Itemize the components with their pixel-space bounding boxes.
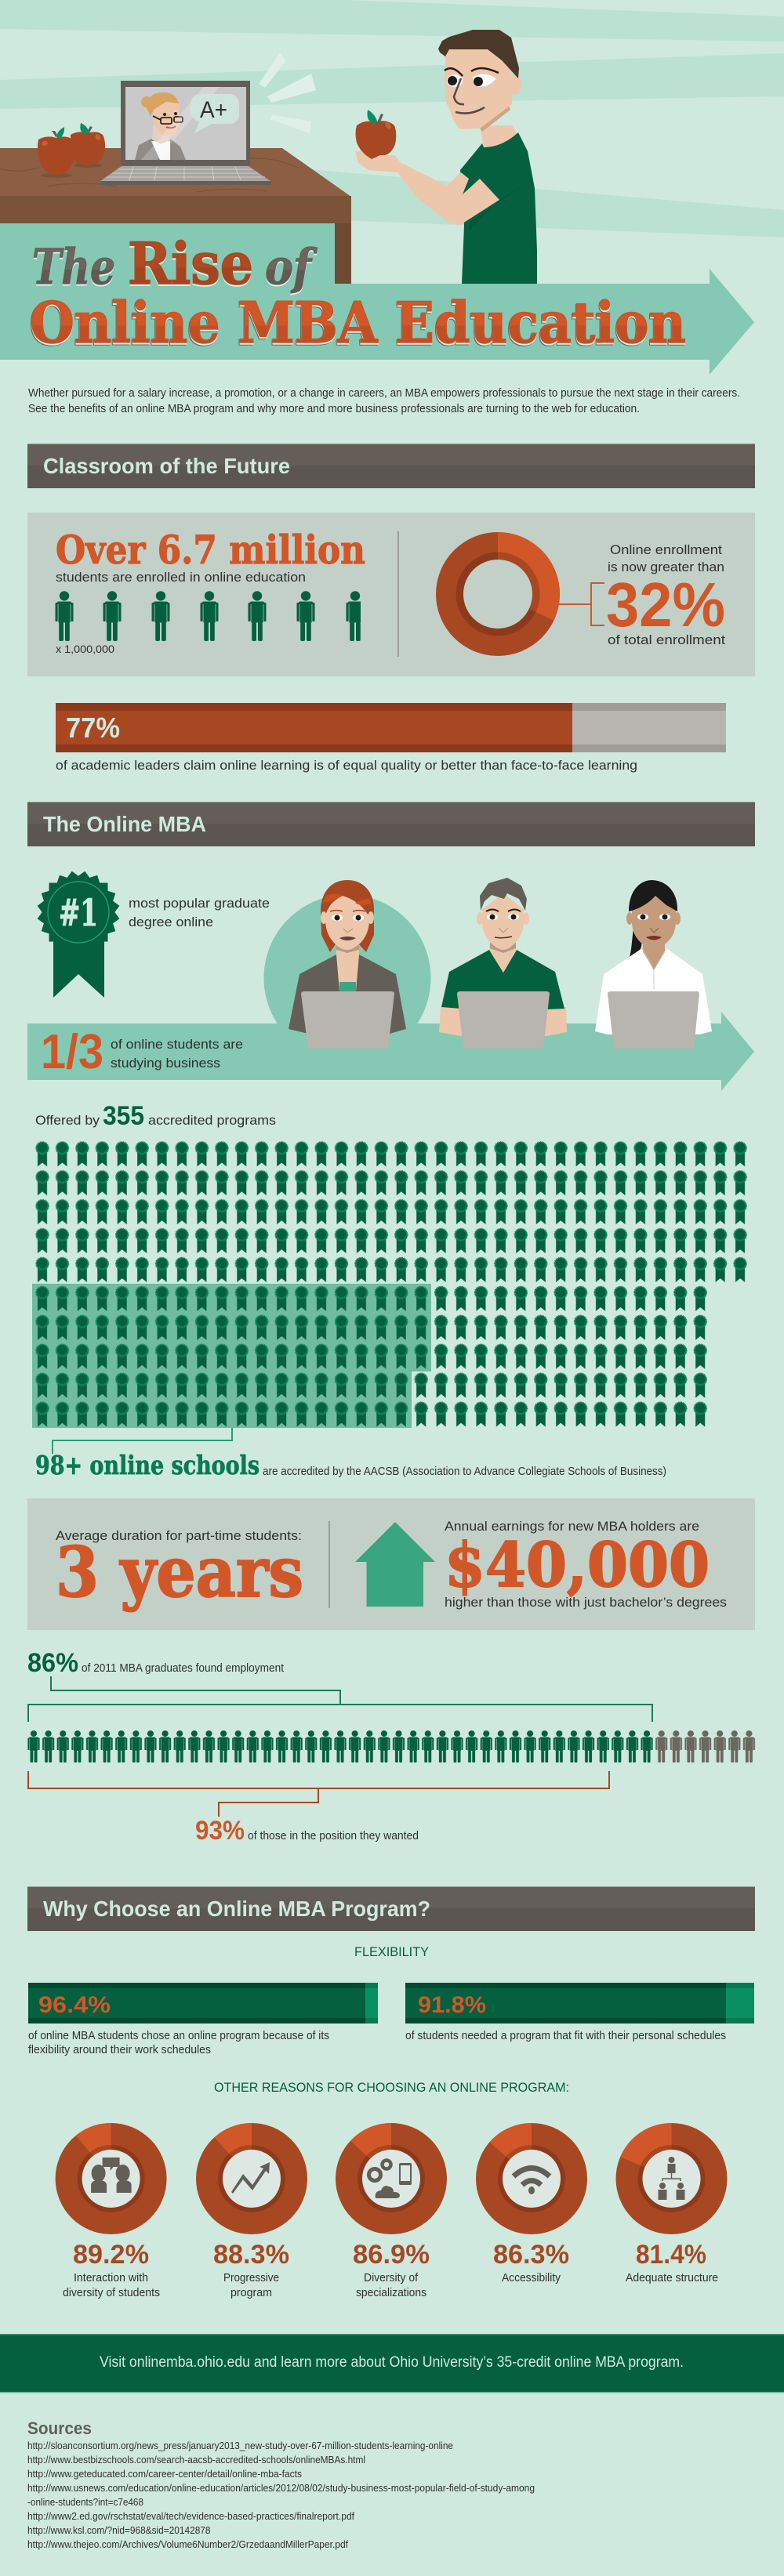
title: Rise xyxy=(128,230,253,298)
speech bubble: A+: A+ xyxy=(200,97,227,123)
illustration: apples on desk xyxy=(38,123,105,178)
illustration: student holding apple xyxy=(355,30,537,284)
section header: Classroom of the Future xyxy=(27,444,755,488)
text: most popular graduate degree xyxy=(129,896,270,929)
stat: 98 plus online schools: 98+ online schools xyxy=(35,1450,260,1480)
icon: up arrow xyxy=(355,1522,435,1607)
donut labels: program xyxy=(230,2286,272,2299)
icon: people talking xyxy=(91,2158,132,2193)
heading: other reasons: OTHER REASONS FOR CHOOSING AN ONLINE PROGRAM: xyxy=(214,2080,569,2095)
student: woman in jacket xyxy=(289,880,406,1049)
stat: 32 percent xyxy=(606,542,725,647)
caption: students enrolled: students are enrolled in online education xyxy=(56,570,306,585)
connector xyxy=(53,1428,232,1454)
section header: Classroom of the Future: Classroom of the Future xyxy=(43,454,290,478)
donut: progressive program xyxy=(196,2123,307,2234)
stat: 3 years: 3 years xyxy=(56,1531,303,1613)
laptop keyboard xyxy=(100,166,271,185)
award ribbon: number 1 xyxy=(38,871,119,998)
source list: http://sloanconsortium.org/news_press/january2013_new-study-over-67-million-students-learning-online xyxy=(27,2440,453,2451)
laptop xyxy=(301,991,394,1049)
bar chart: 91.8 percent xyxy=(405,1983,754,2023)
panel: enrollment stats xyxy=(27,513,755,676)
stat: 93 percent in position wanted: of those in the position they wanted xyxy=(248,1829,419,1842)
donut chart: 32 percent xyxy=(436,532,560,656)
intro text xyxy=(28,387,740,415)
caption: multiplier: x 1,000,000 xyxy=(56,643,114,655)
source list xyxy=(27,2440,535,2550)
illustration: light rays xyxy=(259,53,316,133)
illustration: desk xyxy=(0,148,351,286)
icon: org chart xyxy=(659,2157,685,2200)
instructor on screen xyxy=(135,92,186,160)
teal circle behind student xyxy=(263,895,431,1061)
heading: 355 accredited programs xyxy=(35,1101,276,1131)
stat: 93 percent in position wanted xyxy=(195,1816,419,1846)
captions: flexibility bars xyxy=(28,2029,726,2056)
stat: 32 percent: Online enrollment xyxy=(610,542,722,557)
sources xyxy=(27,2418,535,2550)
stat: 32 percent: 32% xyxy=(606,570,725,639)
title: Online MBA Education xyxy=(30,289,686,356)
bar chart: 91.8 percent: 91.8% xyxy=(418,1992,486,2018)
source list: -online-students?int=c7e468 xyxy=(27,2496,143,2508)
title: of xyxy=(265,238,318,295)
award ribbon: number 1: #1 xyxy=(59,892,98,935)
stat: one third of students: studying business xyxy=(111,1056,220,1071)
section header: The Online MBA xyxy=(27,802,755,846)
heading: 355 accredited programs: accredited programs xyxy=(148,1113,276,1128)
stat: 86 percent employment xyxy=(27,1648,285,1678)
captions: flexibility bars: flexibility around their work schedules xyxy=(28,2043,211,2056)
stat: one third of students xyxy=(41,1025,243,1079)
intro text: See the benefits of an online MBA program and why more and more business professionals are turning to the web for education. xyxy=(28,403,640,415)
donut values xyxy=(73,2240,706,2270)
stat: one third of students: of online students are xyxy=(111,1037,243,1052)
panel: duration and earnings xyxy=(27,1498,755,1630)
captions: flexibility bars: of online MBA students chose an online program because of its xyxy=(28,2029,329,2042)
stat: 86 percent employment: of 2011 MBA graduates found employment xyxy=(82,1661,285,1675)
section header: Why Choose an Online MBA Program: Why Choose an Online MBA Program? xyxy=(43,1897,430,1921)
apple in hand xyxy=(356,110,396,159)
donut labels: Interaction with xyxy=(74,2271,148,2284)
student: man in green polo xyxy=(439,878,567,1049)
heading: 355 accredited programs: Offered by xyxy=(35,1113,100,1128)
banner arrow: one third xyxy=(27,1012,754,1091)
donut values: 86.9% xyxy=(353,2240,430,2270)
footer call to action: Visit onlinemba.ohio.edu and learn more about Ohio University’s 35-credit online MBA program. xyxy=(100,2354,684,2371)
bar chart: 96.4 percent: 96.4% xyxy=(38,1992,111,2018)
glasses xyxy=(153,112,183,124)
illustration: laptop with online instructor xyxy=(100,81,271,185)
icon: wifi xyxy=(514,2168,550,2194)
highlight: accredited schools block xyxy=(32,1284,431,1428)
donut values: 81.4% xyxy=(636,2240,706,2270)
icon: trend arrow xyxy=(231,2162,270,2194)
donut values: 89.2% xyxy=(73,2240,149,2270)
donut labels: Accessibility xyxy=(502,2271,561,2284)
donut: diversity of specializations xyxy=(336,2123,447,2234)
eyes xyxy=(445,68,499,87)
bar chart: 77 percent xyxy=(56,703,726,752)
donut labels: diversity of students xyxy=(63,2286,160,2299)
student: woman in white shirt xyxy=(595,880,712,1049)
speech bubble: A+ xyxy=(190,94,239,133)
bar chart: 96.4 percent xyxy=(28,1983,378,2023)
stat: over 6.7 million: Over 6.7 million xyxy=(56,527,365,573)
donut: accessibility xyxy=(476,2123,587,2234)
screen reflection xyxy=(141,87,220,160)
heading: 355 accredited programs: 355 xyxy=(103,1101,144,1131)
source list: http://www.thejeo.com/Archives/Volume6Number2/GrzedaandMillerPaper.pdf xyxy=(27,2538,348,2550)
source list: http://www2.ed.gov/rschstat/eval/tech/evidence-based-practices/finalreport.pdf xyxy=(27,2510,354,2522)
laptop xyxy=(457,991,550,1049)
donut labels xyxy=(63,2271,718,2299)
source list: http://www.ksl.com/?nid=968&sid=20142878 xyxy=(27,2524,210,2536)
donut labels: Adequate structure xyxy=(626,2271,718,2284)
stat: 40,000 dollars: $40,000 xyxy=(445,1530,710,1601)
title: The xyxy=(32,238,115,295)
hero background bands xyxy=(0,0,784,237)
neck and head xyxy=(445,47,521,147)
text: most popular graduate degree: degree online xyxy=(129,915,213,929)
donut labels: specializations xyxy=(356,2286,426,2299)
stat: 32 percent: of total enrollment xyxy=(608,632,725,647)
captions: flexibility bars: of students needed a program that fit with their personal schedules xyxy=(405,2029,726,2042)
bracket: 86 percent xyxy=(28,1676,652,1722)
bracket: 93 percent xyxy=(28,1771,609,1817)
stat: 86 percent employment: 86% xyxy=(27,1648,78,1678)
stat: 40,000 dollars: higher than those with just bachelor’s degrees xyxy=(445,1595,727,1610)
arm and hand xyxy=(355,151,499,225)
stat: 98 plus online schools xyxy=(35,1450,666,1480)
section header: The Online MBA: The Online MBA xyxy=(43,812,206,836)
source list: http://www.bestbizschools.com/search-aacsb-accredited-schools/onlineMBAs.html xyxy=(27,2454,365,2465)
donut values: 86.3% xyxy=(493,2240,569,2270)
stat: one third of students: 1/3 xyxy=(41,1025,103,1079)
source list: http://www.geteducated.com/career-center/detail/online-mba-facts xyxy=(27,2468,302,2480)
title xyxy=(30,230,686,356)
caption: academic leaders: of academic leaders claim online learning is of equal quality or better than face-to-face learning xyxy=(56,758,637,773)
stat: 98 plus online schools: are accredited by the AACSB (Association to Advance Collegiate Schools of Business) xyxy=(263,1465,666,1478)
ribbon grid: 355 programs xyxy=(32,1140,750,1429)
laptop xyxy=(608,991,699,1049)
hair xyxy=(438,30,519,78)
icon: gears, phone, cloud xyxy=(368,2160,412,2198)
nose and smile xyxy=(454,78,485,114)
shirt xyxy=(460,132,537,284)
section header: Why Choose an Online MBA Program xyxy=(27,1886,755,1931)
person icons: 6.7 x 1,000,000 xyxy=(55,591,364,641)
stat: 3 years: Average duration for part-time students: xyxy=(56,1528,302,1543)
sources heading: Sources xyxy=(27,2418,92,2438)
source list: http://www.usnews.com/education/online-education/articles/2012/08/02/study-business-most-popular-field-of-study-among xyxy=(27,2482,535,2494)
bar chart: 77 percent: 77% xyxy=(66,712,120,744)
title banner arrow xyxy=(0,223,754,375)
donut: adequate structure xyxy=(616,2123,728,2234)
text: most popular graduate degree: most popular graduate xyxy=(129,896,270,911)
footer call to action xyxy=(0,2334,784,2393)
intro text: Whether pursued for a salary increase, a promotion, or a change in careers, an MBA empowers professionals to pursue the next stage in their careers. xyxy=(28,387,740,400)
stat: 93 percent in position wanted: 93% xyxy=(195,1816,245,1846)
bracket connector xyxy=(559,583,604,625)
people row: 50 graduates xyxy=(27,1730,757,1763)
heading: flexibility: FLEXIBILITY xyxy=(354,1944,429,1959)
donut values: 88.3% xyxy=(213,2240,289,2270)
stat: 40,000 dollars: Annual earnings for new MBA holders are xyxy=(445,1519,699,1534)
stat: 32 percent: is now greater than xyxy=(608,560,724,574)
donut: interaction with diversity of students xyxy=(56,2123,167,2234)
donut labels: Progressive xyxy=(223,2271,279,2284)
donut labels: Diversity of xyxy=(364,2271,419,2284)
